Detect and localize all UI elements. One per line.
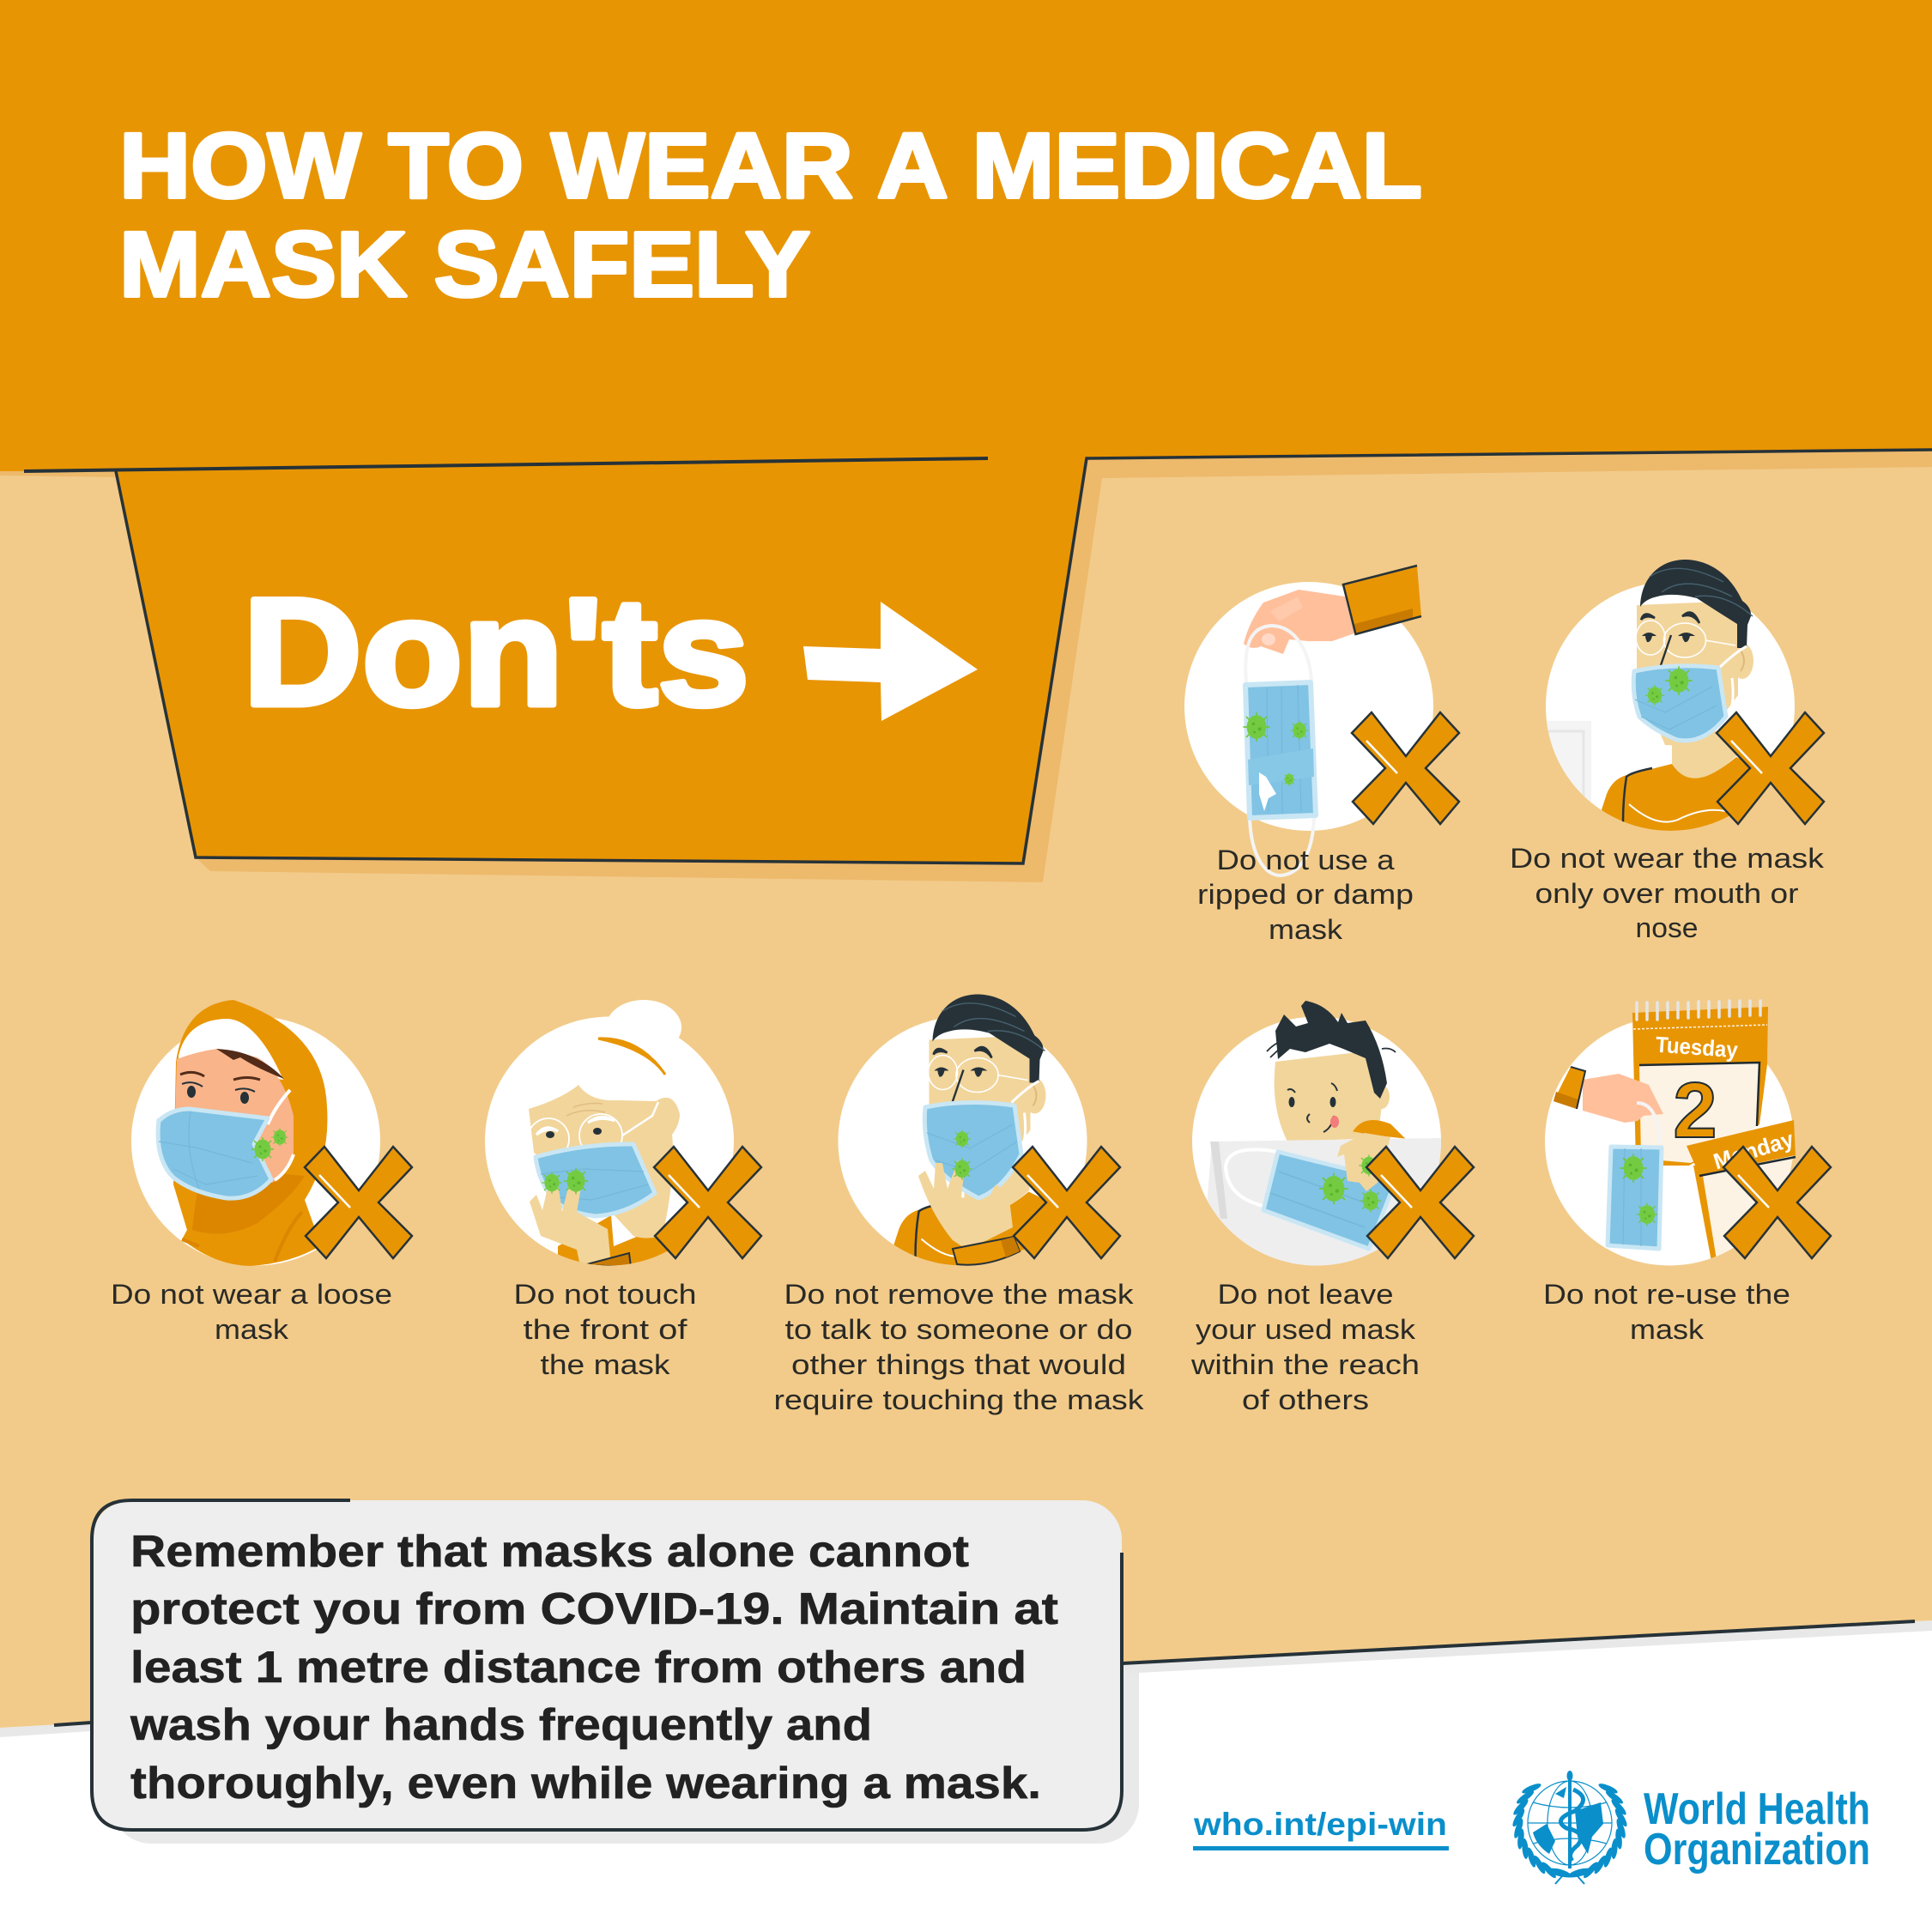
- header band shadow: [0, 450, 1932, 882]
- caption: loose mask: Do not wear a loose: [111, 1279, 392, 1310]
- icon: mask over mouth only: [1545, 560, 1795, 837]
- icon: re-used mask and calendar: [1545, 1001, 1797, 1270]
- icon: removing the mask: [838, 994, 1087, 1272]
- icon: touching the mask: [485, 1000, 738, 1270]
- caption: removing mask: to talk to someone or do: [784, 1314, 1133, 1345]
- caption: reach of others: [1190, 1279, 1420, 1415]
- logo: World Health Organization text: World Health: [1644, 1784, 1870, 1834]
- logo: World Health Organization text: Organization: [1644, 1825, 1870, 1874]
- icon: X mark 2: [1717, 712, 1824, 824]
- callout: reminder box: wash your hands frequently and: [130, 1700, 872, 1750]
- title: HOW TO WEAR A MEDICAL: [119, 113, 1422, 217]
- calendar label: Tuesday: Tuesday: [1655, 1032, 1739, 1063]
- Don'ts heading: Don'ts: [243, 566, 749, 737]
- logo: World Health Organization text: [1644, 1784, 1870, 1874]
- caption: removing mask: Do not remove the mask: [784, 1279, 1135, 1310]
- caption: ripped mask: mask: [1269, 914, 1343, 945]
- caption: touching front: [513, 1279, 697, 1380]
- caption: removing mask: other things that would: [791, 1349, 1126, 1380]
- caption: ripped mask: ripped or damp: [1197, 879, 1414, 910]
- title: [119, 113, 1422, 316]
- caption: ripped mask: [1197, 845, 1414, 945]
- icon: X mark 1: [1352, 712, 1459, 824]
- caption: loose mask: [111, 1279, 392, 1345]
- caption: mouth or nose: nose: [1636, 912, 1698, 943]
- bottom edge shadow: [0, 1620, 1932, 1737]
- icon: ripped mask: [1184, 566, 1433, 875]
- caption: mouth or nose: Do not wear the mask: [1510, 843, 1825, 874]
- icon: loose mask: [131, 1000, 380, 1266]
- calendar label: Monday: Monday: [1711, 1125, 1797, 1174]
- icon: X mark 3: [305, 1147, 412, 1258]
- caption: reach of others: of others: [1242, 1384, 1369, 1415]
- caption: re-use: mask: [1630, 1314, 1705, 1345]
- caption: removing mask: require touching the mask: [774, 1384, 1145, 1415]
- header band: [0, 0, 1932, 471]
- bottom edge line: [54, 1621, 1915, 1725]
- Don'ts panel: [24, 450, 1932, 863]
- icon: used mask within reach: [1192, 1001, 1441, 1270]
- callout: reminder box: thoroughly, even while wearing a mask.: [130, 1759, 1041, 1808]
- calendar numeral: 2: [1673, 1067, 1717, 1154]
- caption: reach of others: Do not leave: [1217, 1279, 1394, 1310]
- arrow: [803, 602, 978, 721]
- title: MASK SAFELY: [119, 212, 810, 316]
- caption: reach of others: your used mask: [1196, 1314, 1416, 1345]
- caption: touching front: the mask: [541, 1349, 671, 1380]
- icon: X mark 7: [1723, 1147, 1831, 1258]
- caption: re-use: [1543, 1279, 1790, 1345]
- callout: reminder box: [92, 1500, 1122, 1830]
- callout: reminder box: least 1 metre distance from others and: [130, 1643, 1027, 1693]
- caption: reach of others: within the reach: [1190, 1349, 1420, 1380]
- link: who.int/epi-win: who.int/epi-win: [1193, 1807, 1447, 1842]
- logo: WHO emblem: [1511, 1771, 1629, 1884]
- beige panel: [0, 446, 1932, 1728]
- caption: ripped mask: Do not use a: [1217, 845, 1395, 875]
- caption: touching front: Do not touch: [513, 1279, 697, 1310]
- callout: reminder box: Remember that masks alone cannot: [130, 1527, 969, 1577]
- reminder box shadow: [112, 1519, 1139, 1844]
- caption: mouth or nose: [1510, 843, 1825, 943]
- caption: loose mask: mask: [215, 1314, 289, 1345]
- caption: re-use: Do not re-use the: [1543, 1279, 1790, 1310]
- icon: X mark 5: [1013, 1147, 1120, 1258]
- callout: reminder box: protect you from COVID-19. Maintain at: [130, 1584, 1058, 1634]
- icon: X mark 6: [1366, 1147, 1474, 1258]
- caption: removing mask: [774, 1279, 1145, 1415]
- icon: X mark 4: [654, 1147, 761, 1258]
- caption: touching front: the front of: [524, 1314, 687, 1345]
- caption: mouth or nose: only over mouth or: [1535, 878, 1799, 909]
